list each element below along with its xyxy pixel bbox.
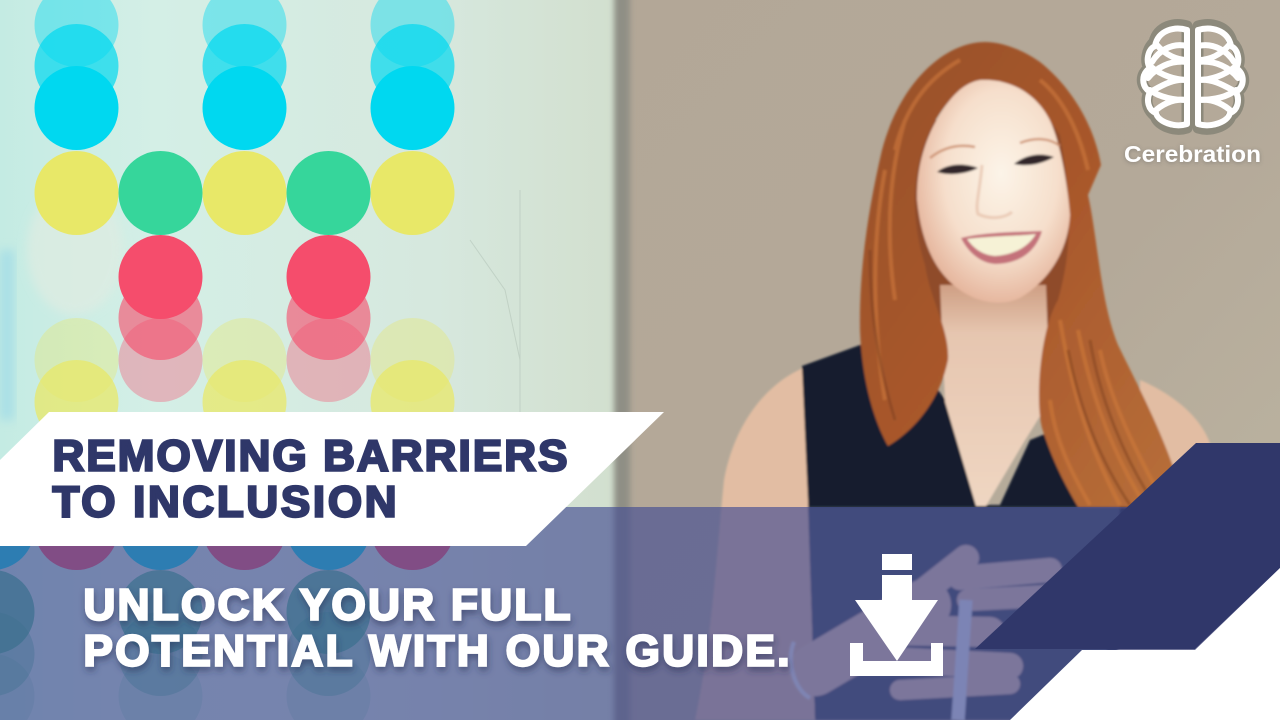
call to action text (84, 580, 790, 676)
call to action text: POTENTIAL WITH OUR GUIDE. (84, 626, 790, 676)
navy parallelogram (975, 443, 1280, 649)
title: REMOVING BARRIERS (52, 432, 568, 480)
eyes (937, 155, 1054, 174)
dress below the band (808, 507, 1120, 720)
coloured dot pattern (0, 0, 454, 720)
chest skin (940, 285, 1050, 506)
title (52, 432, 568, 526)
nose shadow (977, 165, 1012, 218)
dress (802, 345, 1150, 720)
logo wordmark: Cerebration (1124, 141, 1261, 167)
hair (860, 42, 1185, 507)
title: TO INCLUSION (52, 478, 396, 526)
hair strands (875, 60, 1165, 505)
pen (958, 600, 966, 720)
white title banner (0, 412, 664, 546)
icon: brain (1142, 25, 1244, 129)
hands (815, 558, 1050, 690)
brows (930, 139, 1060, 158)
bracelet (791, 642, 810, 698)
mouth (961, 231, 1042, 264)
logo: Cerebration brain (1124, 25, 1261, 167)
photo: smiling woman with red hair (695, 42, 1212, 720)
hair behind the neck (900, 120, 1085, 345)
translucent blue band (0, 507, 1280, 720)
arms and shoulders (695, 366, 1212, 720)
icon: download (850, 554, 943, 676)
face (917, 80, 1070, 303)
white corner shape (1010, 568, 1280, 720)
call to action text: UNLOCK YOUR FULL (84, 580, 570, 630)
